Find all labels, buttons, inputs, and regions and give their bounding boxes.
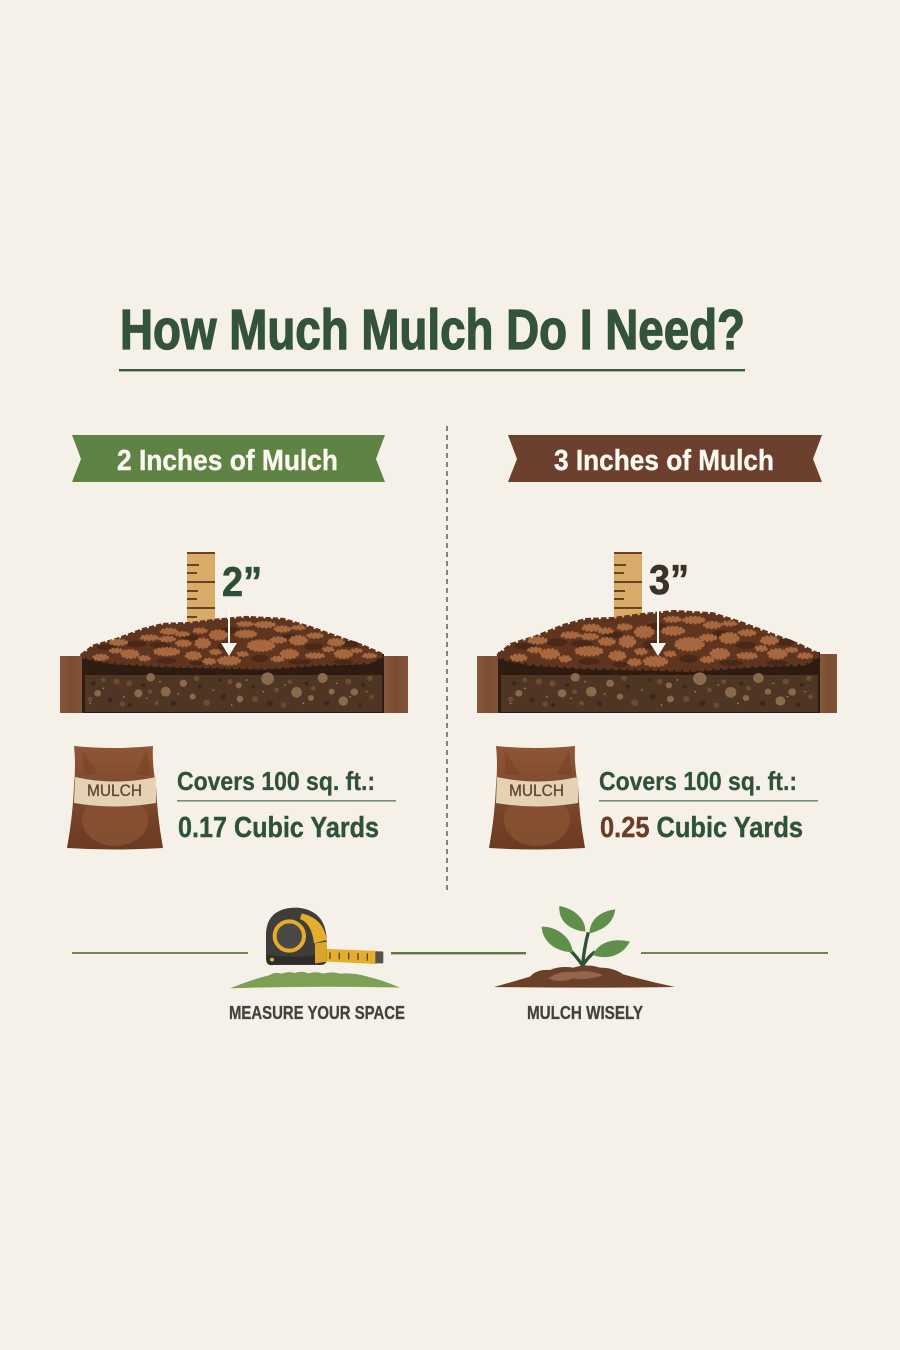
depth label: 3 inches: 3” (649, 556, 689, 603)
label: mulch wisely: MULCH WISELY (527, 1003, 643, 1023)
mulch bag: 3 inches: MULCH (509, 781, 564, 800)
panel: 3 inches of mulch (477, 435, 837, 850)
raised bed: 2 inches (60, 617, 408, 713)
arrow: 2 inches (221, 605, 237, 656)
ruler: 2 inches (187, 552, 215, 624)
vertical divider (446, 426, 448, 890)
panel: 2 inches of mulch (60, 435, 408, 850)
depth label: 2 inches: 2” (222, 558, 262, 605)
title: How Much Mulch Do I Need? (120, 298, 745, 362)
banner: 2 inches (72, 435, 385, 482)
arrow: 3 inches (650, 605, 666, 656)
icon: tape measure on grass (230, 908, 400, 988)
mulch bag: 2 inches: MULCH (87, 781, 142, 800)
title underline (119, 369, 745, 371)
ruler: 3 inches (614, 552, 642, 620)
footer divider lines (72, 952, 828, 954)
raised bed: 3 inches (477, 612, 837, 713)
banner: 3 inches (508, 435, 822, 482)
banner: 3 inches: 3 Inches of Mulch (554, 445, 774, 477)
coverage: 2 inches: Covers 100 sq. ft.: (177, 766, 375, 796)
icon: seedling in soil (494, 906, 675, 988)
coverage: 2 inches (177, 766, 396, 844)
coverage: 2 inches: 0.17 Cubic Yards (178, 812, 379, 844)
banner: 2 inches: 2 Inches of Mulch (117, 445, 338, 477)
label: measure your space: MEASURE YOUR SPACE (229, 1003, 405, 1023)
coverage: 3 inches (599, 766, 818, 844)
coverage: 3 inches: Covers 100 sq. ft.: (599, 766, 797, 796)
mulch bag: 2 inches (67, 746, 163, 850)
mulch bag: 3 inches (489, 746, 585, 850)
coverage: 3 inches: 0.25 Cubic Yards (600, 812, 803, 844)
